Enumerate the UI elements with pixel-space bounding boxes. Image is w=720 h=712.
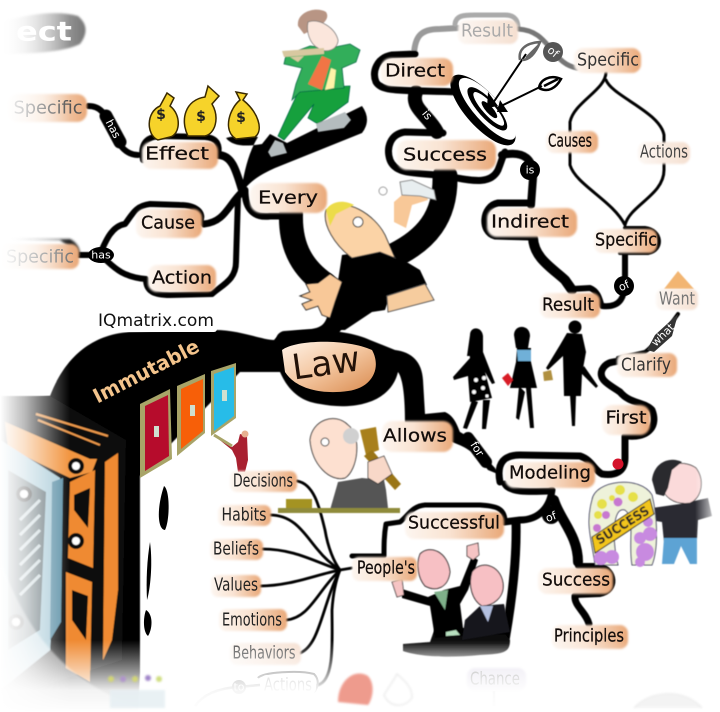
branches: success cluster — [375, 15, 664, 306]
label: Success: Success — [403, 144, 487, 166]
label: Beliefs: Beliefs — [213, 538, 259, 560]
head and hair — [298, 10, 327, 34]
label: Cause: Cause — [141, 212, 195, 234]
label: Successful: Successful — [408, 512, 500, 534]
icon: judge — [278, 419, 401, 513]
scales — [282, 48, 324, 57]
icon: figure with key — [214, 430, 248, 472]
node group: modeling labels — [352, 288, 698, 649]
connector word: of lower: of — [616, 277, 633, 294]
label: Success — [397, 140, 496, 170]
label: Specific upper: Specific — [14, 98, 82, 118]
connector word: what — [647, 314, 678, 352]
man head — [325, 202, 395, 258]
connector word: to: to — [233, 680, 245, 694]
title tab: ect — [0, 13, 86, 54]
label: Effect: Effect — [145, 144, 209, 164]
icon: success wreath and man — [589, 460, 712, 567]
label: Values: Values — [214, 574, 258, 596]
icon: money bags: $ — [236, 110, 246, 126]
label: IQmatrix.com: IQmatrix.com — [98, 311, 214, 331]
icon: faded eye — [634, 694, 702, 708]
label: Result lower: Result — [542, 294, 594, 316]
label: Specific upper — [8, 94, 87, 122]
label: First: First — [606, 408, 646, 428]
man hand with glass — [394, 193, 428, 228]
label: Action — [148, 265, 216, 292]
tie and shirt — [308, 56, 331, 90]
door: red — [140, 389, 172, 478]
node group: people's traits labels — [195, 470, 526, 706]
pants — [278, 86, 350, 140]
text: Immutable: Immutable — [89, 334, 203, 408]
central node: Law: Law — [290, 339, 362, 389]
icon: archery target — [440, 42, 561, 155]
connector word: is right: is — [526, 164, 535, 176]
node group: success labels — [381, 20, 690, 318]
label: Every: Every — [258, 188, 318, 208]
label: Effect — [142, 142, 218, 169]
man leg cuff — [387, 284, 434, 312]
connector word: is right — [520, 160, 540, 180]
connector word: what: what — [649, 320, 678, 349]
label: People's: People's — [357, 558, 415, 578]
icon: faded leaf — [384, 674, 412, 705]
label: Causes: Causes — [548, 130, 592, 152]
label: Allows — [382, 421, 453, 452]
glass and splash — [400, 180, 436, 200]
label: Indirect: Indirect — [491, 212, 569, 232]
branches: law, allows and modeling cluster — [0, 314, 678, 712]
connector word: to — [195, 680, 260, 706]
label: Specific lower: Specific — [6, 246, 74, 268]
title tab: ect: ect — [16, 16, 72, 48]
connector word: has lower — [88, 247, 114, 263]
connector word: has lower: has — [91, 248, 111, 262]
label: Actions faded — [258, 672, 318, 696]
label: Actions faded: Actions — [264, 674, 312, 696]
faded bottom icons — [108, 674, 702, 708]
shoes — [268, 140, 287, 157]
label: Actions: Actions — [640, 142, 688, 162]
label: People's — [352, 557, 417, 581]
icon: businessman with glass — [300, 180, 436, 330]
branches: successful and people's cluster — [260, 481, 612, 685]
building panel: immutable doorway structure — [0, 396, 126, 700]
silhouette: woman with dotted dress — [453, 328, 495, 429]
label: Actions — [638, 142, 690, 164]
decorative drips below the doors — [144, 486, 169, 636]
label: Action: Action — [152, 268, 212, 288]
silhouette: woman with blue top — [502, 327, 537, 428]
connector word: for: for — [467, 439, 487, 459]
label: Specific top right: Specific — [577, 50, 639, 70]
connector word: of top: of — [545, 44, 562, 61]
icon: two successful men — [392, 543, 510, 640]
icon: money bags: $ — [196, 109, 206, 125]
man hand — [300, 274, 342, 318]
label: Success lower: Success — [542, 570, 610, 590]
icon: success wreath and man: SUCCESS — [594, 504, 652, 548]
icon: faded colored dots — [108, 675, 165, 708]
connector word: is left: is — [419, 107, 435, 123]
label: Chance — [467, 668, 526, 706]
label: Behaviors: Behaviors — [232, 642, 296, 664]
label: Direct: Direct — [385, 60, 445, 82]
label: Principles: Principles — [554, 626, 624, 646]
icon: red ball — [612, 458, 624, 470]
label: Emotions: Emotions — [222, 610, 282, 630]
silhouette: woman with bag — [543, 320, 598, 426]
connector word: has upper: has — [103, 117, 123, 141]
label: Indirect — [487, 208, 577, 237]
icon: green man with scales — [268, 10, 360, 157]
jacket — [284, 44, 360, 100]
icon: want triangle — [664, 271, 694, 289]
label: Habits: Habits — [222, 504, 266, 526]
label: Every — [250, 183, 327, 213]
label: Decisions: Decisions — [233, 470, 293, 492]
branches: cause and effect cluster — [10, 106, 367, 340]
door: blue — [211, 363, 236, 436]
doors — [140, 363, 236, 478]
label: Want: Want — [659, 288, 695, 310]
label: Cause — [136, 209, 202, 238]
label: Chance: Chance — [470, 668, 520, 690]
label: Allows: Allows — [383, 426, 447, 446]
icon: money bags — [149, 86, 259, 140]
connector word: of middle: of — [544, 509, 559, 525]
label: Modeling: Modeling — [509, 462, 591, 484]
icon: money bags: $ — [156, 107, 166, 123]
node group: top-left labels — [0, 94, 327, 292]
connector word: of top — [543, 42, 563, 62]
icon: faded red shape — [338, 674, 373, 705]
label: First — [602, 405, 650, 435]
connector word: of lower — [614, 276, 634, 296]
door: orange — [177, 374, 205, 456]
label: Specific lower right: Specific — [595, 230, 657, 250]
label: Direct — [381, 58, 453, 86]
man torso — [330, 250, 427, 330]
icon: women silhouettes — [453, 320, 598, 429]
label: Result top: Result — [461, 20, 513, 42]
label: Clarify: Clarify — [621, 354, 671, 376]
